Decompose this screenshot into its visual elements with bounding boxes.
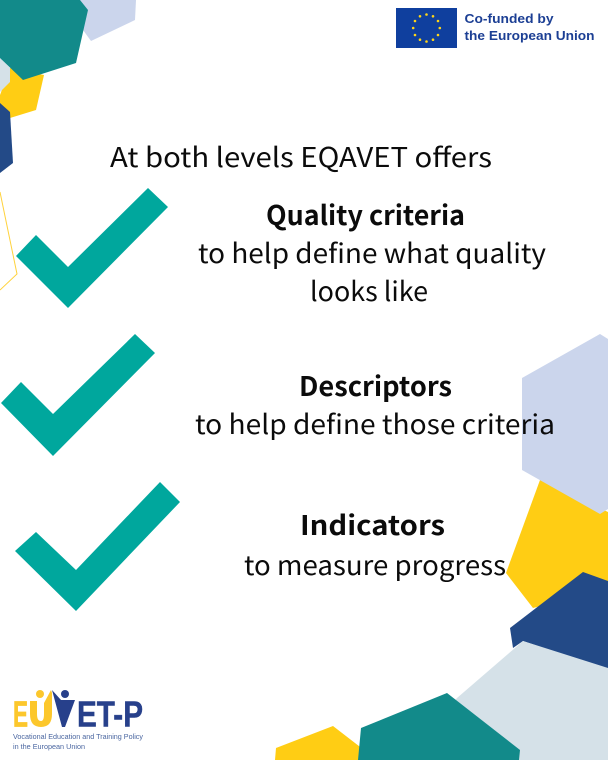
- text block: quality criteria: [198, 194, 546, 309]
- text block: quality criteria: looks like: [310, 270, 428, 309]
- text block: indicators: [244, 504, 506, 583]
- icon: check mark 3: [15, 482, 180, 611]
- top-left hexagon cluster: [0, 0, 136, 290]
- co-funded label: Co-funded by: [464, 11, 554, 26]
- text block: quality criteria: to help define what quality: [198, 232, 546, 271]
- EUVET-P logo: [13, 690, 143, 751]
- icon: EU flag: [396, 8, 457, 48]
- text block: descriptors: Descriptors: [299, 365, 452, 404]
- logo tagline: Vocational Education and Training Policy: [13, 732, 143, 741]
- logo figure: navy V: [52, 690, 75, 727]
- logo tagline: in the European Union: [13, 742, 85, 751]
- logo figure: yellow U: [30, 690, 52, 727]
- icon: check mark 2: [1, 334, 155, 456]
- text block: descriptors: to help define those criteria: [195, 403, 555, 442]
- bottom-right hexagon cluster: [275, 334, 608, 760]
- EU co-funding logo: [396, 8, 595, 48]
- co-funded label: the European Union: [464, 28, 595, 43]
- icon: check mark 1: [16, 188, 168, 308]
- heading: At both levels EQAVET offers: [110, 136, 492, 175]
- text block: indicators: Indicators: [300, 504, 445, 543]
- text block: indicators: to measure progress: [244, 544, 506, 583]
- text block: quality criteria: Quality criteria: [266, 194, 465, 233]
- logo letters ET-P: ET-P: [77, 694, 143, 734]
- logo letter E: E: [13, 694, 28, 734]
- text block: descriptors: [195, 365, 555, 442]
